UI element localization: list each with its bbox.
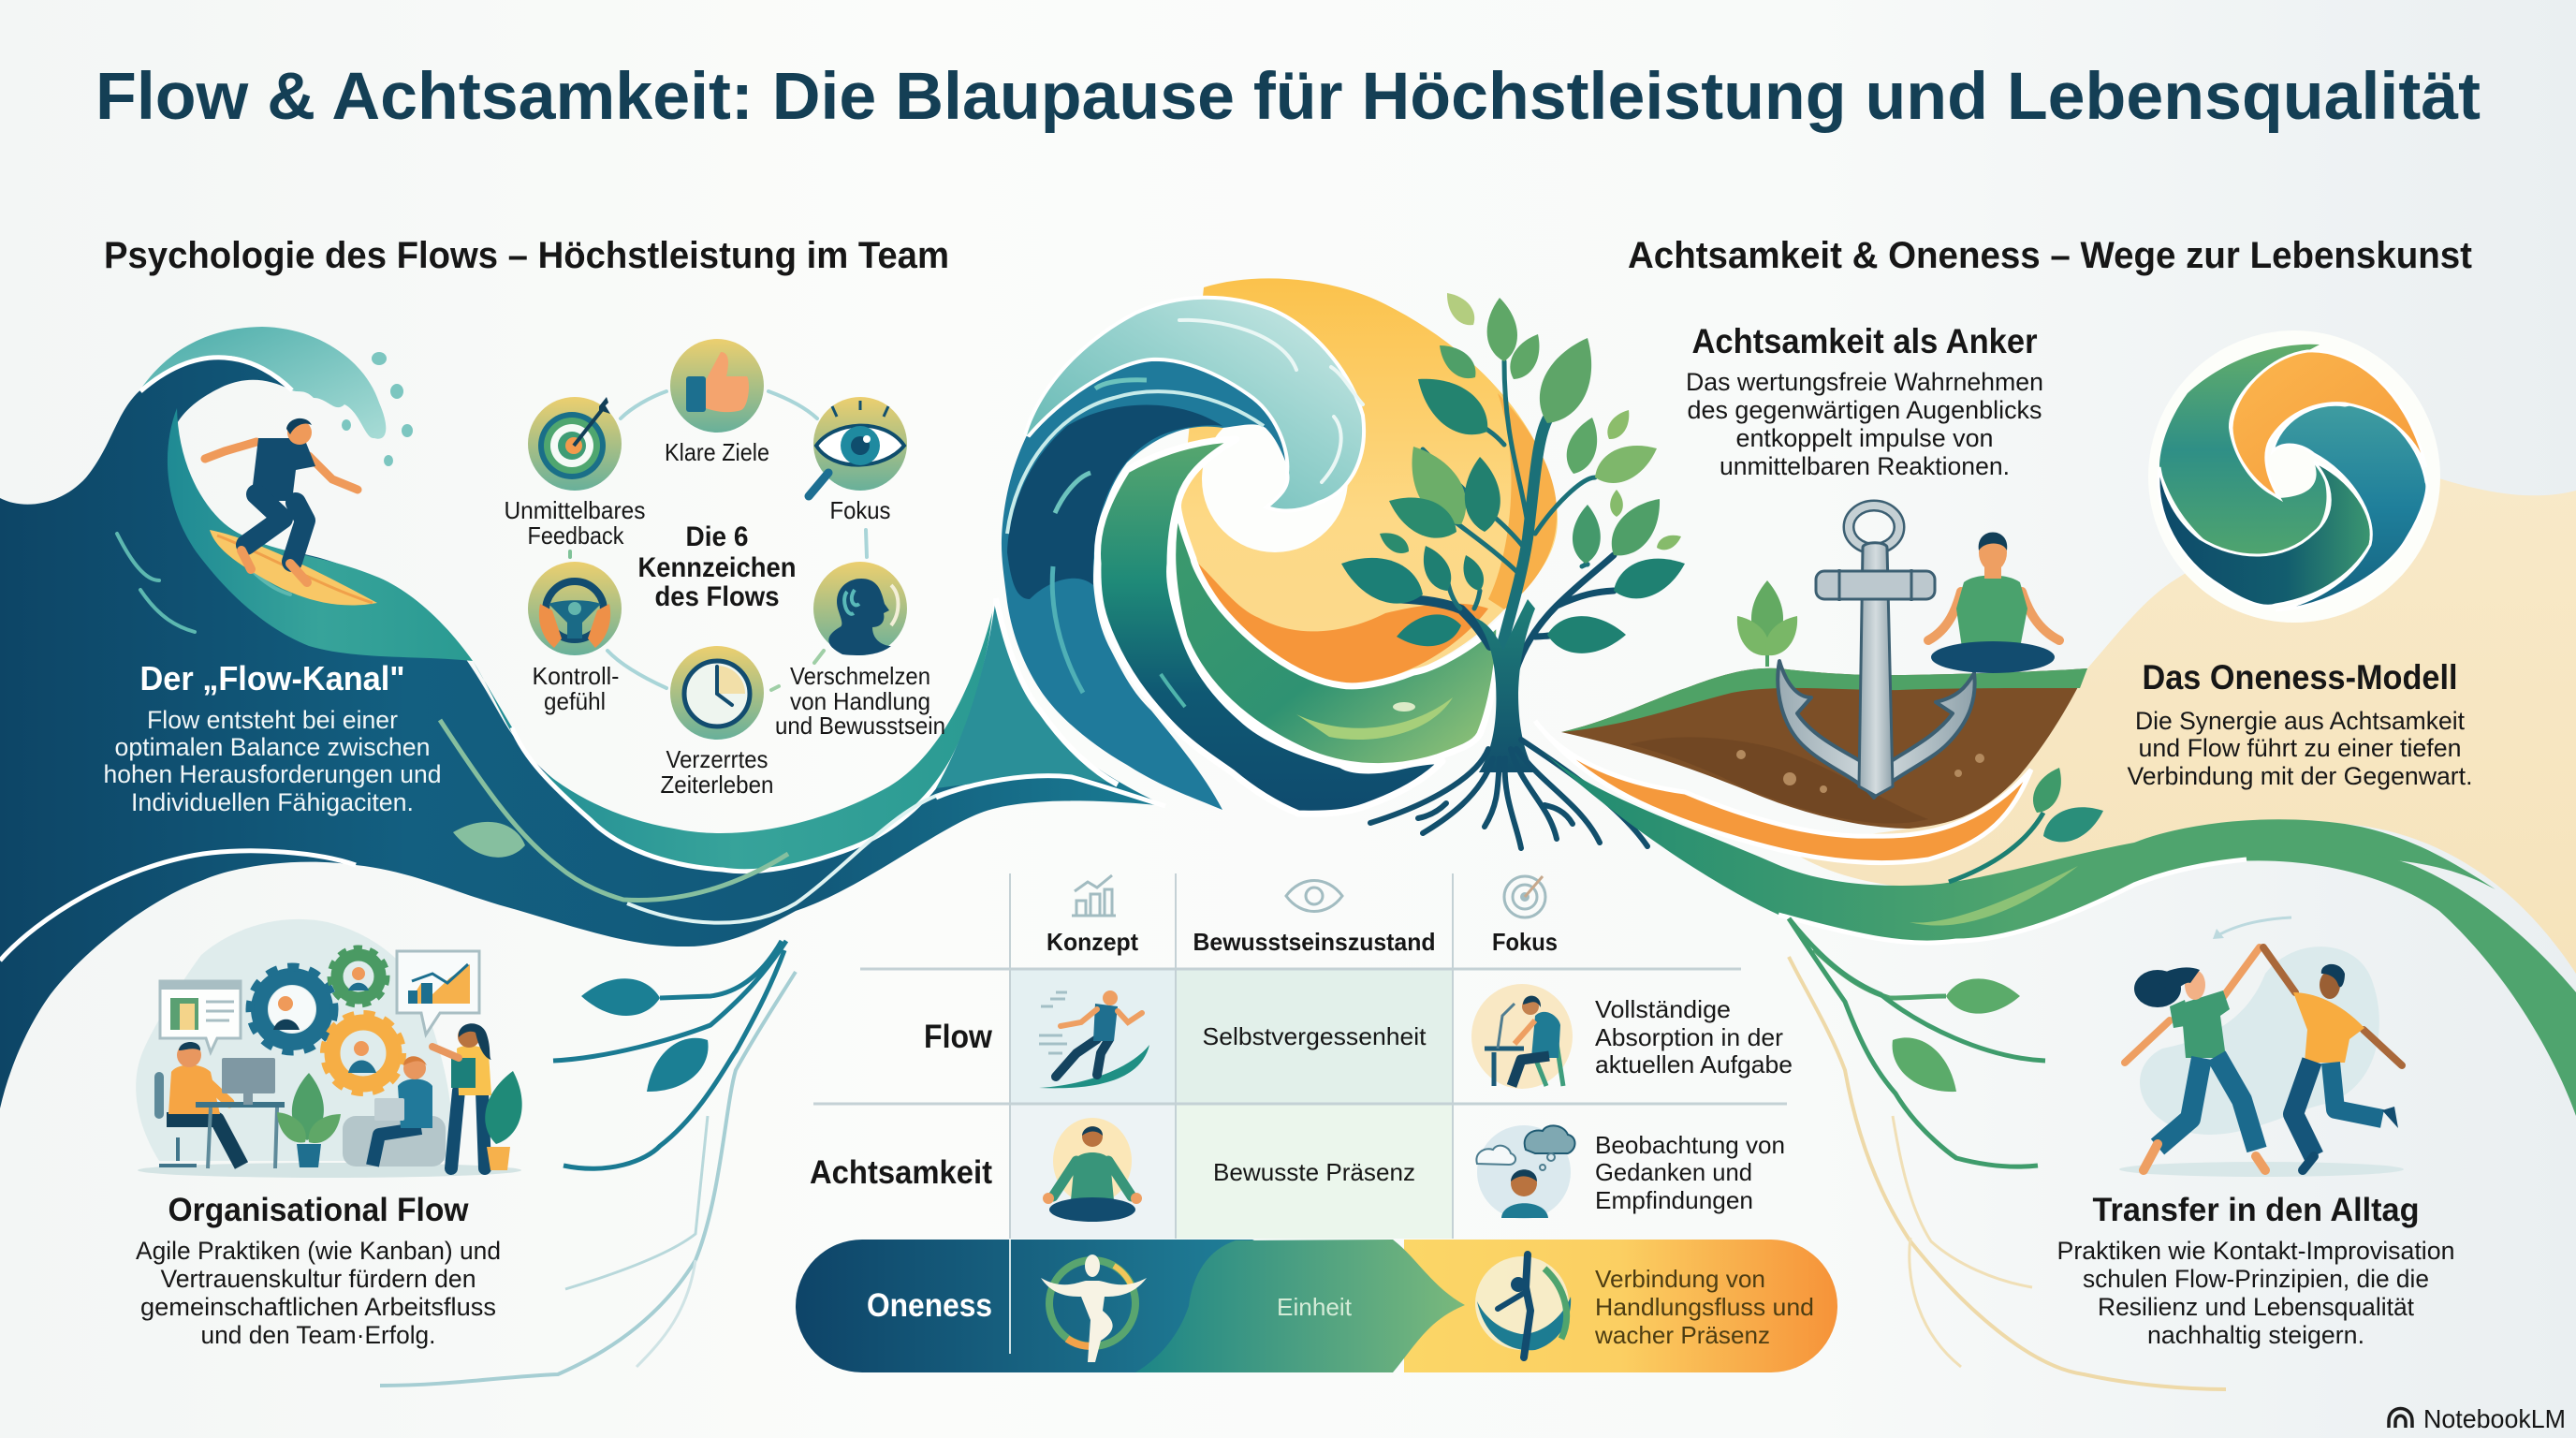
label: Verzerrtes Zeiterleben (661, 745, 773, 799)
icon: thumbs up, Klare Ziele (670, 339, 764, 433)
label: Klare Ziele: Klare Ziele (665, 438, 769, 466)
illustration: two people high five (2119, 917, 2404, 1177)
icon: target, Feedback (528, 397, 622, 491)
cell: Fokus Achtsamkeit: Gedanken und (1595, 1158, 1752, 1186)
central wave and sun (936, 278, 1558, 814)
text block: Flow-Kanal: Flow entsteht bei einer (147, 706, 398, 734)
text block: Achtsamkeit als Anker: unmittelbaren Reaktionen. (1720, 452, 2010, 480)
table cell tints (1010, 970, 1453, 1239)
tree (1334, 286, 1691, 848)
text block: Transfer in den Alltag (2057, 1192, 2454, 1349)
water droplets (342, 352, 413, 466)
text block: Flow-Kanal: optimalen Balance zwischen (114, 733, 431, 761)
ring center heading: Kennzeichen (638, 552, 796, 583)
cell: Fokus Achtsamkeit (1595, 1131, 1785, 1214)
icon: runner on board (1039, 990, 1149, 1088)
man (2263, 947, 2402, 1170)
text block: Organisational Flow: gemeinschaftlichen Arbeitsfluss (140, 1293, 496, 1321)
woman (2125, 947, 2265, 1170)
ring center heading: Die 6 (685, 521, 749, 552)
comparison table (796, 873, 1837, 1372)
text block: Transfer in den Alltag: Praktiken wie Kontakt-Improvisation (2057, 1237, 2454, 1265)
vines left (380, 941, 796, 1386)
table header: Fokus (1492, 876, 1558, 956)
label: Unmittelbares Feedback: Unmittelbares (504, 496, 646, 524)
text block: Achtsamkeit als Anker: Das wertungsfreie Wahrnehmen (1686, 368, 2043, 396)
icon: anchor (1778, 506, 1975, 798)
table header: Bewusstseinszustand (1193, 880, 1436, 956)
heading: right section: Achtsamkeit & Oneness – Wege zur Lebenskunst (1628, 235, 2472, 276)
logo: NotebookLM: NotebookLM (2423, 1404, 2566, 1433)
text block: Transfer in den Alltag: Transfer in den Alltag (2093, 1192, 2419, 1228)
text block: Achtsamkeit als Anker: des gegenwärtigen Augenblicks (1687, 396, 2042, 424)
text block: Organisational Flow: Organisational Flow (168, 1192, 469, 1228)
label: Unmittelbares Feedback: Feedback (528, 521, 624, 550)
icon: thoughts and clouds (1476, 1125, 1574, 1219)
label: Verschmelzen von Handlung und Bewusstsein: von Handlung (790, 687, 930, 715)
team: plant (270, 1073, 347, 1167)
team: gears (250, 948, 402, 1093)
table header: Fokus: Fokus (1492, 928, 1558, 956)
title: Flow & Achtsamkeit: Die Blaupause für Höchstleistung und Lebensqualität (95, 60, 2481, 134)
cell: Fokus Flow: Vollständige (1595, 995, 1731, 1023)
text block: Achtsamkeit als Anker: entkoppelt impulse von (1735, 424, 1994, 452)
text block: Organisational Flow: Agile Praktiken (wie Kanban) und (136, 1237, 501, 1265)
text block: Organisational Flow: und den Team·Erfolg. (200, 1321, 436, 1349)
row label: Flow: Flow (924, 1019, 993, 1055)
icon: surfer (205, 418, 377, 606)
illustration: organisational flow team (136, 919, 530, 1178)
text block: Flow-Kanal: Individuellen Fähigaciten. (131, 788, 414, 816)
ring center heading: des Flows (655, 581, 779, 612)
heading: left section: Psychologie des Flows – Höchstleistung im Team (104, 235, 949, 276)
icon: dancer in wave (1475, 1255, 1571, 1357)
text block: Achtsamkeit als Anker: Achtsamkeit als Anker (1692, 322, 2037, 360)
label: Verzerrtes Zeiterleben: Zeiterleben (661, 770, 773, 799)
icon: steering wheel, Kontrollgefuehl (528, 562, 622, 655)
text block: Achtsamkeit als Anker (1686, 322, 2043, 480)
label: Verschmelzen von Handlung und Bewusstsein: und Bewusstsein (775, 712, 945, 740)
label: Fokus: Fokus (829, 496, 891, 524)
team: standing woman (432, 1023, 530, 1170)
icon: head silhouette, Verschmelzen (813, 562, 907, 655)
icon: meditating person (1928, 532, 2059, 673)
text block: Oneness-Modell (2127, 658, 2473, 790)
oneness pill (796, 1240, 1837, 1372)
cell: Bewusste Praesenz: Bewusste Präsenz (1213, 1158, 1415, 1186)
label: Verschmelzen von Handlung und Bewusstsein: Verschmelzen (790, 662, 930, 690)
icon: person at desk (1471, 984, 1573, 1089)
row label: Oneness: Oneness (867, 1287, 992, 1324)
tan background wave (1778, 478, 2576, 974)
label: Verschmelzen von Handlung und Bewusstsein (775, 662, 945, 740)
cell: Selbstvergessenheit: Selbstvergessenheit (1202, 1022, 1427, 1050)
text block: Transfer in den Alltag: Resilienz und Lebensqualität (2098, 1293, 2414, 1321)
text block: Oneness-Modell: Die Synergie aus Achtsamkeit (2135, 707, 2465, 735)
text block: Flow-Kanal: hohen Herausforderungen und (103, 760, 442, 788)
ring connector arcs (570, 391, 867, 690)
cell: Fokus Oneness: wacher Präsenz (1594, 1321, 1770, 1349)
label: Kontrollgefuehl: Kontroll- (532, 662, 620, 690)
cell: Fokus Achtsamkeit: Beobachtung von (1595, 1131, 1785, 1159)
team: speech windows (160, 951, 479, 1052)
cell: Fokus Oneness: Handlungsfluss und (1595, 1293, 1814, 1321)
row label: Achtsamkeit: Achtsamkeit (810, 1154, 992, 1191)
icon: oneness swirl (2148, 330, 2440, 623)
cell: Fokus Achtsamkeit: Empfindungen (1595, 1186, 1753, 1214)
cell: Fokus Flow: Absorption in der (1595, 1023, 1783, 1051)
leaves (1334, 286, 1691, 653)
cell: Einheit: Einheit (1277, 1293, 1353, 1321)
left flow wave (0, 327, 1165, 1108)
cell: Fokus Flow (1595, 995, 1793, 1078)
orange and green flow bands (1535, 721, 2576, 1116)
table header: Konzept: Konzept (1046, 928, 1138, 956)
icon: eye, Fokus (809, 397, 907, 496)
label: Kontrollgefuehl (532, 662, 620, 715)
cell: Fokus Oneness: Verbindung von (1595, 1265, 1765, 1293)
text block: Flow-Kanal: Der „Flow-Kanal" (140, 659, 404, 697)
text block: Transfer in den Alltag: schulen Flow-Prinzipien, die die (2083, 1265, 2429, 1293)
icon: balancing figure (1041, 1255, 1147, 1362)
table header: Bewusstseinszustand: Bewusstseinszustand (1193, 928, 1436, 956)
icon: clock, Zeiterleben (670, 646, 764, 740)
text block: Organisational Flow: Vertrauenskultur fürdern den (161, 1265, 476, 1293)
label: Verzerrtes Zeiterleben: Verzerrtes (666, 745, 768, 773)
text block: Oneness-Modell: Das Oneness-Modell (2142, 658, 2458, 697)
text block: Oneness-Modell: und Flow führt zu einer tiefen (2138, 734, 2462, 762)
roots (1370, 740, 1647, 848)
text block: Transfer in den Alltag: nachhaltig steigern. (2147, 1321, 2364, 1349)
label: Unmittelbares Feedback (504, 496, 646, 550)
trunk (1475, 599, 1535, 772)
icon: meditating figure (1043, 1118, 1142, 1222)
team: man at desk (159, 1042, 285, 1168)
team: seated woman (343, 1056, 446, 1167)
soil (1561, 668, 2087, 829)
vines right (1789, 918, 2226, 1389)
ring center heading (638, 521, 796, 612)
table header: Konzept (1046, 875, 1138, 956)
cell: Fokus Oneness (1594, 1265, 1814, 1349)
cell: Fokus Flow: aktuellen Aufgabe (1595, 1050, 1793, 1078)
text block: Organisational Flow (136, 1192, 501, 1349)
text block: Flow-Kanal (103, 659, 442, 816)
text block: Oneness-Modell: Verbindung mit der Gegenwart. (2127, 762, 2473, 790)
label: Kontrollgefuehl: gefühl (544, 687, 606, 715)
right sprout (1949, 762, 2109, 882)
icon: sprout (1728, 580, 1807, 667)
